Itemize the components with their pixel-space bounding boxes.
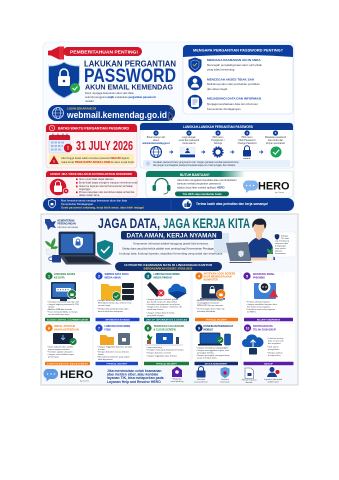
card 3 bullets: untuk data kantor.: [147, 308, 164, 311]
closing bar: Mari bersama-sama menjaga keamanan akun dan data: [61, 198, 128, 202]
card 4 bullets: terhadap data Anda.: [197, 310, 216, 313]
intro text: melalui:: [85, 99, 95, 103]
list of consequences: dalam waktu lama.: [79, 194, 100, 197]
title: jaga data jaga kerja kita: [98, 215, 250, 231]
card 6 bullets: • Jangan instal aplikasi tanpa: [47, 353, 75, 356]
arrow: [169, 151, 173, 153]
help text: [177, 178, 237, 189]
card 10 bullets: dan terjadwal.: [268, 342, 281, 345]
panel: why the change matters: MENGAPA PERGANTIAN PASSWORD PENTING?: [193, 48, 284, 52]
warning box: !: [53, 159, 55, 164]
icon: laptop and phone: [198, 333, 230, 346]
card 10 bullets: [267, 338, 284, 357]
card 5 bullets: ke HERO.: [247, 312, 257, 314]
subtitle pill: DATA AMAN, KERJA NYAMAN: [126, 232, 217, 240]
reporting note: layanan TIK, bisa melaporkan pada: [107, 376, 164, 380]
step 2: [179, 130, 200, 157]
speech card: message from TIK: kerja seluruh: [275, 247, 286, 250]
card 9 category: DEVICE MANAGEMENT: [205, 362, 228, 365]
card 8 bullets: [146, 346, 184, 358]
icon: security shield with padlock: [48, 62, 80, 98]
speech card: message from TIK: di lingkungan: [275, 246, 286, 248]
card 5: phishing: WASPADAI EMAIL: [253, 273, 275, 276]
card 7: physical documents: 7: [98, 326, 101, 330]
card 2 category: INFORMATION STORAGE: [105, 318, 130, 321]
heading pill: 10 practices: 10 PRAKTIK KEAMANAN DATA DI LINGKUNGAN KANTOR: [124, 263, 213, 267]
logo: kementerian perdagangan: [45, 219, 79, 230]
card 3 category: USE OF INFORMATION & DEVICES: [146, 318, 188, 321]
card 5 bullets: link tautan mencurigakan.: [247, 306, 271, 308]
poster: password change notice: [43, 42, 294, 211]
icon: red megaphone: [48, 46, 64, 60]
icon: laptop with padlock: [200, 284, 226, 300]
card 3 bullets: dan kantor tanpa izin bila terlibat.: [147, 300, 178, 304]
logo: HERO: by iComm: [80, 380, 89, 382]
icon: folder and locked cabinet: [100, 333, 130, 345]
step 4: [238, 130, 257, 158]
arrow: [230, 151, 234, 153]
card 7 bullets: tidak digunakan.: [98, 358, 114, 361]
step 5: simpan perubahan: [266, 142, 286, 145]
card 9 bullets: aman di tempat kerja.: [197, 356, 217, 360]
card 6 bullets: • Pastikan update komputer.: [47, 350, 73, 354]
card 9 bullets: • Jangan meninggalkan laptop, atau: [196, 349, 230, 352]
panel: need help: BUTUH BANTUAN?: [180, 173, 210, 177]
card 3 bullets: yang tidak terjaga.: [147, 314, 164, 317]
step 3: Pilih menu: [213, 137, 224, 139]
icon: folder and server: [101, 283, 134, 300]
step 1: [142, 130, 170, 158]
speech card: message from TIK: TIK, kami: [281, 238, 290, 240]
heading pill: 10 practices: [115, 262, 222, 271]
tip: careful with downloads: File lain hati-hati: [242, 378, 257, 382]
card 7 bullets: di meja.: [98, 349, 106, 351]
panel: consequences: [46, 171, 138, 197]
card 8 bullets: • Jaga meja kerja: [146, 346, 163, 349]
step 2: email dan password: [179, 139, 200, 142]
card 5: phishing: PHISHING: [253, 276, 265, 280]
card 8 category: PHYSICAL SECURITY: [156, 362, 178, 365]
card 2: safe storage: 2: [98, 274, 101, 278]
card 4: lock screen: SAAT MENINGGALKAN: [204, 276, 232, 278]
title: lakukan pergantian password: PASSWORD: [84, 65, 176, 87]
speech card: message from TIK: siap mendukung: [275, 240, 289, 242]
card 4 bullets: • Ini mencegah akses tidak sah: [196, 308, 226, 310]
tip: careful with downloads: [242, 368, 257, 384]
logo: HERO: [43, 369, 93, 382]
card 7 bullets: [97, 346, 133, 361]
step 4: Change Password: [238, 142, 257, 145]
card 7 bullets: • Musnahkan dokumen yang sudah: [97, 356, 130, 358]
icon: mug: [49, 255, 61, 262]
speech card: message from TIK: Sebagai: [281, 236, 289, 238]
help text: Jika Anda mengalami kendala atau membutuhkan: [177, 178, 237, 182]
card 7: physical documents: FISIK: [104, 328, 111, 332]
card 3 bullets: • Gunakan penyimpanan resmi yang: [146, 303, 180, 306]
card 9: mobile devices: MOBILE: [204, 328, 214, 332]
card 1 bullets: [47, 300, 80, 316]
icon: teal shield: [97, 240, 113, 260]
card 9 bullets: perangkat terbuka.: [197, 352, 215, 354]
card 10 bullets: • Ikuti aturan: [267, 346, 279, 348]
arrow: [259, 151, 263, 153]
icon: desk plant: [267, 247, 274, 261]
card 5 category: SECURITY AWARENESS: [257, 318, 281, 321]
card 1 bullets: sesuai kebutuhan kerja: [48, 313, 70, 316]
step 5: [265, 130, 287, 158]
icon: red padlock: [50, 179, 69, 195]
reporting note: Jika menemukan celah keamanan: [107, 369, 161, 373]
logo: HERO: HERO: [258, 180, 290, 192]
icon: cloud backup: [242, 335, 263, 354]
card 10 category: BACKUP: [264, 362, 273, 365]
logo: kementerian perdagangan: REPUBLIK INDONESIA: [58, 226, 79, 229]
illustration: employee at laptop: [214, 218, 275, 263]
tip: report incidents: Laporkan jika terjadi: [264, 378, 283, 381]
card 6: software: INSTAL APLIKASI: [54, 325, 75, 328]
card 6 category: CONFIGURATION MANAGEMENT: [47, 362, 89, 365]
title: lakukan pergantian password: AKUN EMAIL KEMENDAG: [85, 82, 173, 91]
card 5 bullets: • Laporkan email mencurigakan: [246, 308, 276, 311]
card 1: access to data: LINDUNGI AKSES: [54, 273, 76, 276]
logo: HERO: HERO: [60, 369, 93, 381]
intro text: seluruh pengguna wajib melakukan pergantian password: [85, 95, 156, 99]
tip: strong password: [195, 366, 208, 384]
card 5: phishing: 5: [246, 274, 249, 278]
icon: headset: [152, 179, 170, 194]
card 9: mobile devices: 9: [198, 326, 201, 330]
list of consequences: Email tidak dapat mengirim maupun menerima email.: [79, 182, 138, 185]
reporting note: atau insiden siber, atau kendala: [107, 373, 158, 377]
card 6 bullets: persetujuan.: [48, 356, 60, 358]
step 4: Ubah Password /: [238, 139, 256, 142]
list of consequences: [76, 178, 138, 197]
card 2 bullets: • Simpan data pada media PIN server,: [97, 299, 133, 302]
step 1: 1: [155, 131, 157, 135]
card 8: clean desk: & CLEAR SCREEN: [154, 328, 176, 332]
panel: consequences: AKIBAT JIKA TIDAK MELAKUKAN PERGANTIAN PASSWORD: [50, 172, 133, 176]
card 4 bullets: • Aktifkan Lock Screen ketika: [196, 299, 224, 302]
title: jaga data jaga kerja kita: JAGA KERJA KITA: [163, 215, 250, 231]
tip: strong password: password kuat: [195, 380, 208, 384]
steps note: Gunakan password baru yang kuat & unik. Jangan gunakan kembali password lama: [153, 161, 239, 164]
reporting note: [107, 369, 164, 384]
intro text: [119, 242, 223, 256]
card 1 bullets: • Aktifkan MFA bila tersedia: [47, 308, 73, 311]
card 9: mobile devices: [193, 324, 240, 366]
panel: steps: LANGKAH-LANGKAH PERGANTIAN PASSWORD: [183, 125, 254, 129]
reason 2: prevent illegal access: dan akses ilegal.: [207, 87, 228, 91]
reason 2: prevent illegal access: Melindungi akun dari perubahan pemilikan: [207, 82, 260, 86]
steps note: dan jangan membagikan password kepada siapa pun, baik sengaja, dan rahasia.: [153, 164, 236, 167]
reason 3: protect data: MELINDUNGI DATA DAN INFORMASI: [207, 96, 261, 100]
tip: update security: [220, 367, 230, 384]
step 3: 3: [217, 131, 219, 135]
help text: silakan buat tiket melalui aplikasi HERO.: [177, 185, 226, 189]
card 7: physical documents: LINDUNGI DOKUMEN: [104, 325, 130, 328]
reason 1: protect the account: Mencegah penyalahgunaan akun oleh pihak: [207, 63, 262, 67]
card 2 bullets: sesuai fungsi.: [98, 305, 111, 307]
card 6: software: 6: [48, 326, 51, 330]
heading pill: 10 practices: BERDASARKAN ISO/IEC 27002:2022: [144, 266, 193, 270]
deadline date: 31 JULY 2026: [76, 139, 133, 153]
icon: thumbs up: [182, 199, 192, 209]
card 4: lock screen: [193, 272, 240, 322]
card 2: safe storage: [94, 272, 141, 322]
card 5: phishing: [242, 272, 295, 322]
logo: HERO: by iComm: [275, 192, 284, 194]
card 2 bullets: device lokal atau komputer.: [98, 310, 124, 313]
card 10 bullets: di tempat lain.: [268, 354, 281, 357]
card 10 bullets: data secara rutin: [268, 340, 284, 342]
closing bar: Kementerian Perdagangan.: [61, 202, 94, 206]
step 5: baru Anda dan: [268, 139, 284, 142]
tip: report incidents: [264, 367, 283, 384]
tip: careful with downloads: diunduh: [245, 382, 253, 384]
reason 3: protect data: Kementerian Perdagangan.: [207, 107, 241, 111]
intro text: Demi menjaga keamanan akun dan data,: [85, 91, 134, 95]
banner: important notice: [63, 47, 142, 56]
card 10 bullets: • Simpan salinan: [267, 352, 283, 354]
warning box: maka Anda TIDAK DAPAT AKSES LOGIN ke akun email Anda.: [61, 160, 135, 164]
card 8: clean desk: [143, 324, 190, 366]
panel: why the change matters: [183, 45, 293, 114]
help text: bantuan terkait pergantian password,: [177, 182, 221, 186]
step 5: 5: [275, 131, 277, 135]
card 5 bullets: • Jangan membuka lampiran atau: [246, 303, 278, 306]
card 4 category: PHYSICAL SECURITY: [206, 318, 228, 321]
card 3: removable media: [143, 272, 190, 322]
card 1 category: ACCESS CONTROL & AUTHENTICATION: [47, 318, 89, 321]
poster background: [43, 42, 294, 211]
reason 1: protect the account: yang tidak berwenang.: [207, 68, 235, 72]
card 3 bullets: Google Drive, Dropbox, OneDrive, dll: [147, 306, 182, 308]
step 3: [211, 130, 225, 157]
support pill: [175, 192, 229, 196]
tip: strong password: Gunakan: [197, 379, 205, 381]
card 3 bullets: • Jangan gunakan flashdisk pribadi: [146, 298, 179, 301]
logo: kementerian perdagangan: PERDAGANGAN: [58, 222, 76, 226]
card 7 bullets: lemari.: [98, 353, 105, 356]
step 2: 2: [188, 131, 190, 135]
footer: [43, 366, 283, 384]
list of consequences: Akun email tidak dapat diakses.: [79, 178, 114, 181]
title: lakukan pergantian password: LAKUKAN PERGANTIAN: [84, 58, 176, 68]
card 1 bullets: • Kunci komputer Anda, isi hanya: [47, 310, 78, 314]
card 6 bullets: [47, 346, 75, 358]
card 8 bullets: • Jangan tinggalkan layar terbuka.: [146, 354, 178, 358]
card 3: removable media: LINDUNGI DOKUMEN/: [154, 273, 180, 276]
card 4: lock screen: KOMPUTER: [204, 278, 218, 282]
card 2: safe storage: SIMPAN DATA PADA: [104, 273, 129, 276]
closing bar: Terima kasih atas perhatian dan kerja samanya!: [196, 202, 268, 206]
icon: clock: [49, 125, 55, 131]
list of consequences: Akses ke layanan internal Kementerian terhadap: [79, 185, 134, 188]
card 2: safe storage: MEDIA AMAN: [104, 276, 121, 280]
reason 2: prevent illegal access: MENCEGAH AKSES TIDAK SAH: [207, 78, 255, 82]
arrow: [201, 151, 205, 153]
card 1: access to data: KE DATA: [54, 276, 65, 280]
card 5 bullets: • Periksa alamat pengirim.: [246, 300, 271, 304]
panel: steps: [140, 123, 293, 168]
card 7 bullets: • Simpan dokumen secara terkunci: [97, 350, 130, 354]
card 2 bullets: MOC Akun Kantor atau sistem resmi: [98, 302, 132, 304]
icon: potted plant: [45, 238, 58, 255]
card 3: removable media: 3: [147, 274, 150, 278]
intro text: Lindungi data, lindungi layanan, wujudkan Kemendag yang andal dan terpercaya.: [119, 252, 223, 256]
speech card: message from TIK: pegawai: [275, 250, 283, 252]
intro text: [85, 91, 156, 103]
card 2 bullets: • Hindari data penting hanya pada: [97, 308, 129, 310]
card 1: access to data: [43, 272, 92, 322]
step 1: webmail.kemendag.go.id: [142, 143, 170, 145]
card 1: access to data: 1: [48, 274, 51, 278]
closing bar: [43, 198, 294, 211]
logo: HERO: [243, 180, 290, 194]
step 4: 4: [246, 131, 248, 135]
step 1: Buka browser dan: [147, 136, 166, 139]
reason 3: protect data: Menjaga kerahasiaan data dan informasi: [207, 102, 258, 106]
card 10: backup: [242, 324, 295, 366]
card 7 bullets: • Jangan tinggalkan dokumen penting: [97, 346, 133, 348]
card 4 bullets: meninggalkan komputer,: [197, 302, 220, 304]
poster: jaga data jaga kerja kita: [41, 214, 298, 385]
icon: USB and cloud: [147, 282, 187, 299]
support pill: Tim HKS siap membantu Anda: [183, 192, 222, 196]
icon: clean desk with monitor: [145, 333, 183, 345]
reason 1: protect the account: [188, 58, 262, 72]
logo: kementerian perdagangan: KEMENTERIAN: [58, 220, 75, 222]
card 7 category: PHYSICAL SECURITY: [107, 362, 128, 365]
poster background: [41, 214, 298, 385]
card 4: lock screen: 4: [198, 274, 201, 278]
reason 1: protect the account: MENJAGA KEAMANAN AKUN ANDA: [207, 58, 261, 62]
list of consequences: Proses pekerjaan dan koordinasi dapat terhambat: [79, 191, 135, 194]
login pill: webmail address: [48, 105, 175, 121]
closing bar: Ganti password sekarang, kerja lebih aman, data lebih terjaga!: [61, 206, 144, 210]
panel: need help: [146, 171, 293, 197]
list of consequences: terganggu.: [79, 188, 91, 191]
tip: report incidents: insiden siber: [267, 382, 279, 384]
card 1 bullets: • Jangan bagikan password & PIN,: [47, 303, 79, 306]
card 10 bullets: • Lakukan backup: [267, 338, 284, 340]
card 9: mobile devices: KUNCIKAN PERANGKAT: [204, 325, 234, 328]
card 8: clean desk: 8: [147, 326, 150, 330]
card 4: lock screen: AKTIFKAN LOCK SCREEN: [204, 272, 235, 276]
card 9 bullets: [196, 346, 230, 360]
warning box: [49, 154, 135, 165]
banner: important notice: PEMBERITAHUAN PENTING!: [70, 49, 139, 54]
title: lakukan pergantian password: [84, 58, 176, 91]
card 3: removable media: MEDIA PINDAH: [154, 276, 172, 280]
step 5: Masukkan password: [265, 136, 287, 139]
card 6 bullets: • Instal software dari sumber: [47, 346, 74, 348]
panel: deadline: [46, 124, 137, 168]
step 1: akses: [153, 140, 160, 142]
card 10 bullets: pengelolaan: [268, 349, 280, 351]
icon: monitor with password: [51, 282, 76, 301]
reason 2: prevent illegal access: [188, 76, 260, 91]
warning box: Jika hingga batas waktu tersebut password BELUM diganti,: [61, 156, 130, 160]
reason 3: protect data: [188, 95, 261, 111]
card 8 bullets: • Pastikan meja kerja tetap bersih tertata.: [146, 348, 184, 352]
tip: phishing email: Waspadai: [173, 378, 182, 380]
illustration: laptop with shields: [45, 232, 113, 264]
icon: phishing email: [254, 281, 278, 299]
card 9 bullets: • Jangan menitipkan laptop/gadget.: [196, 346, 229, 350]
tip: update security: keamanan: [220, 382, 230, 384]
card 8 bullets: • Simpan dokumen sensitif.: [146, 352, 172, 354]
step 3: Settings: [214, 142, 223, 145]
card 1 bullets: simpan: [48, 306, 56, 308]
card 10: backup: 10: [246, 326, 249, 330]
card 6: software: HANYA KETENTUAN: [54, 328, 79, 332]
card 4 bullets: WINDOWS Screen otomatis.: [197, 304, 224, 307]
panel: deadline: BATAS WAKTU PERGANTIAN PASSWORD: [58, 126, 130, 130]
tip: update security: Perbarui: [221, 379, 229, 381]
card 9 bullets: • Simpan perangkat, perangkat kerja: [196, 354, 230, 357]
step 2: Login dengan: [182, 137, 197, 139]
tip: phishing email: email phishing: [171, 381, 183, 383]
intro text: Setiap data yang kita kelola adalah aset penting bagi Kementerian Perdagangan.: [122, 246, 220, 250]
card 7: physical documents: [94, 324, 141, 366]
card 3 bullets: [146, 298, 182, 317]
card 1 bullets: • Gunakan password kuat dan unik: [47, 300, 80, 304]
tip: phishing email: [171, 366, 183, 383]
icon: calendar with alert: !: [67, 146, 69, 152]
speech card: message from TIK: Kementerian.: [275, 252, 287, 255]
speech card: message from TIK: [273, 232, 296, 257]
card 8: clean desk: TERAPKAN CLEAN DESK: [154, 325, 185, 328]
steps note: [143, 160, 290, 167]
card 5 bullets: [246, 300, 278, 314]
title: jaga data jaga kerja kita: JAGA DATA,: [98, 215, 160, 231]
card 2 bullets: [97, 299, 133, 313]
step 2: Anda saat ini: [182, 142, 196, 145]
card 10: backup: TELAH DI BACKUP: [253, 328, 276, 332]
card 6: software: [43, 324, 92, 366]
intro text: Keamanan informasi adalah tanggung jawab kita bersama.: [133, 242, 209, 246]
card 4 bullets: [196, 299, 226, 313]
step 3: Pengaturan /: [211, 139, 225, 142]
icon: monitor with download: [53, 333, 77, 345]
login pill: webmail address: webmail.kemendag.go.id: [66, 110, 167, 120]
speech card: message from TIK: keamanan data: [275, 242, 289, 245]
step 4: Pilih menu: [242, 137, 253, 139]
login pill: webmail address: LOGIN SEKARANG DI: [67, 106, 96, 110]
card 6 bullets: terpercaya/perusahaan.: [48, 348, 70, 351]
reporting note: Layanan Help and Resolve HERO: [107, 380, 161, 384]
card 10: backup: PASTIKAN DATA: [253, 325, 273, 328]
card 3 bullets: • Jangan simpan data di media: [146, 312, 175, 314]
